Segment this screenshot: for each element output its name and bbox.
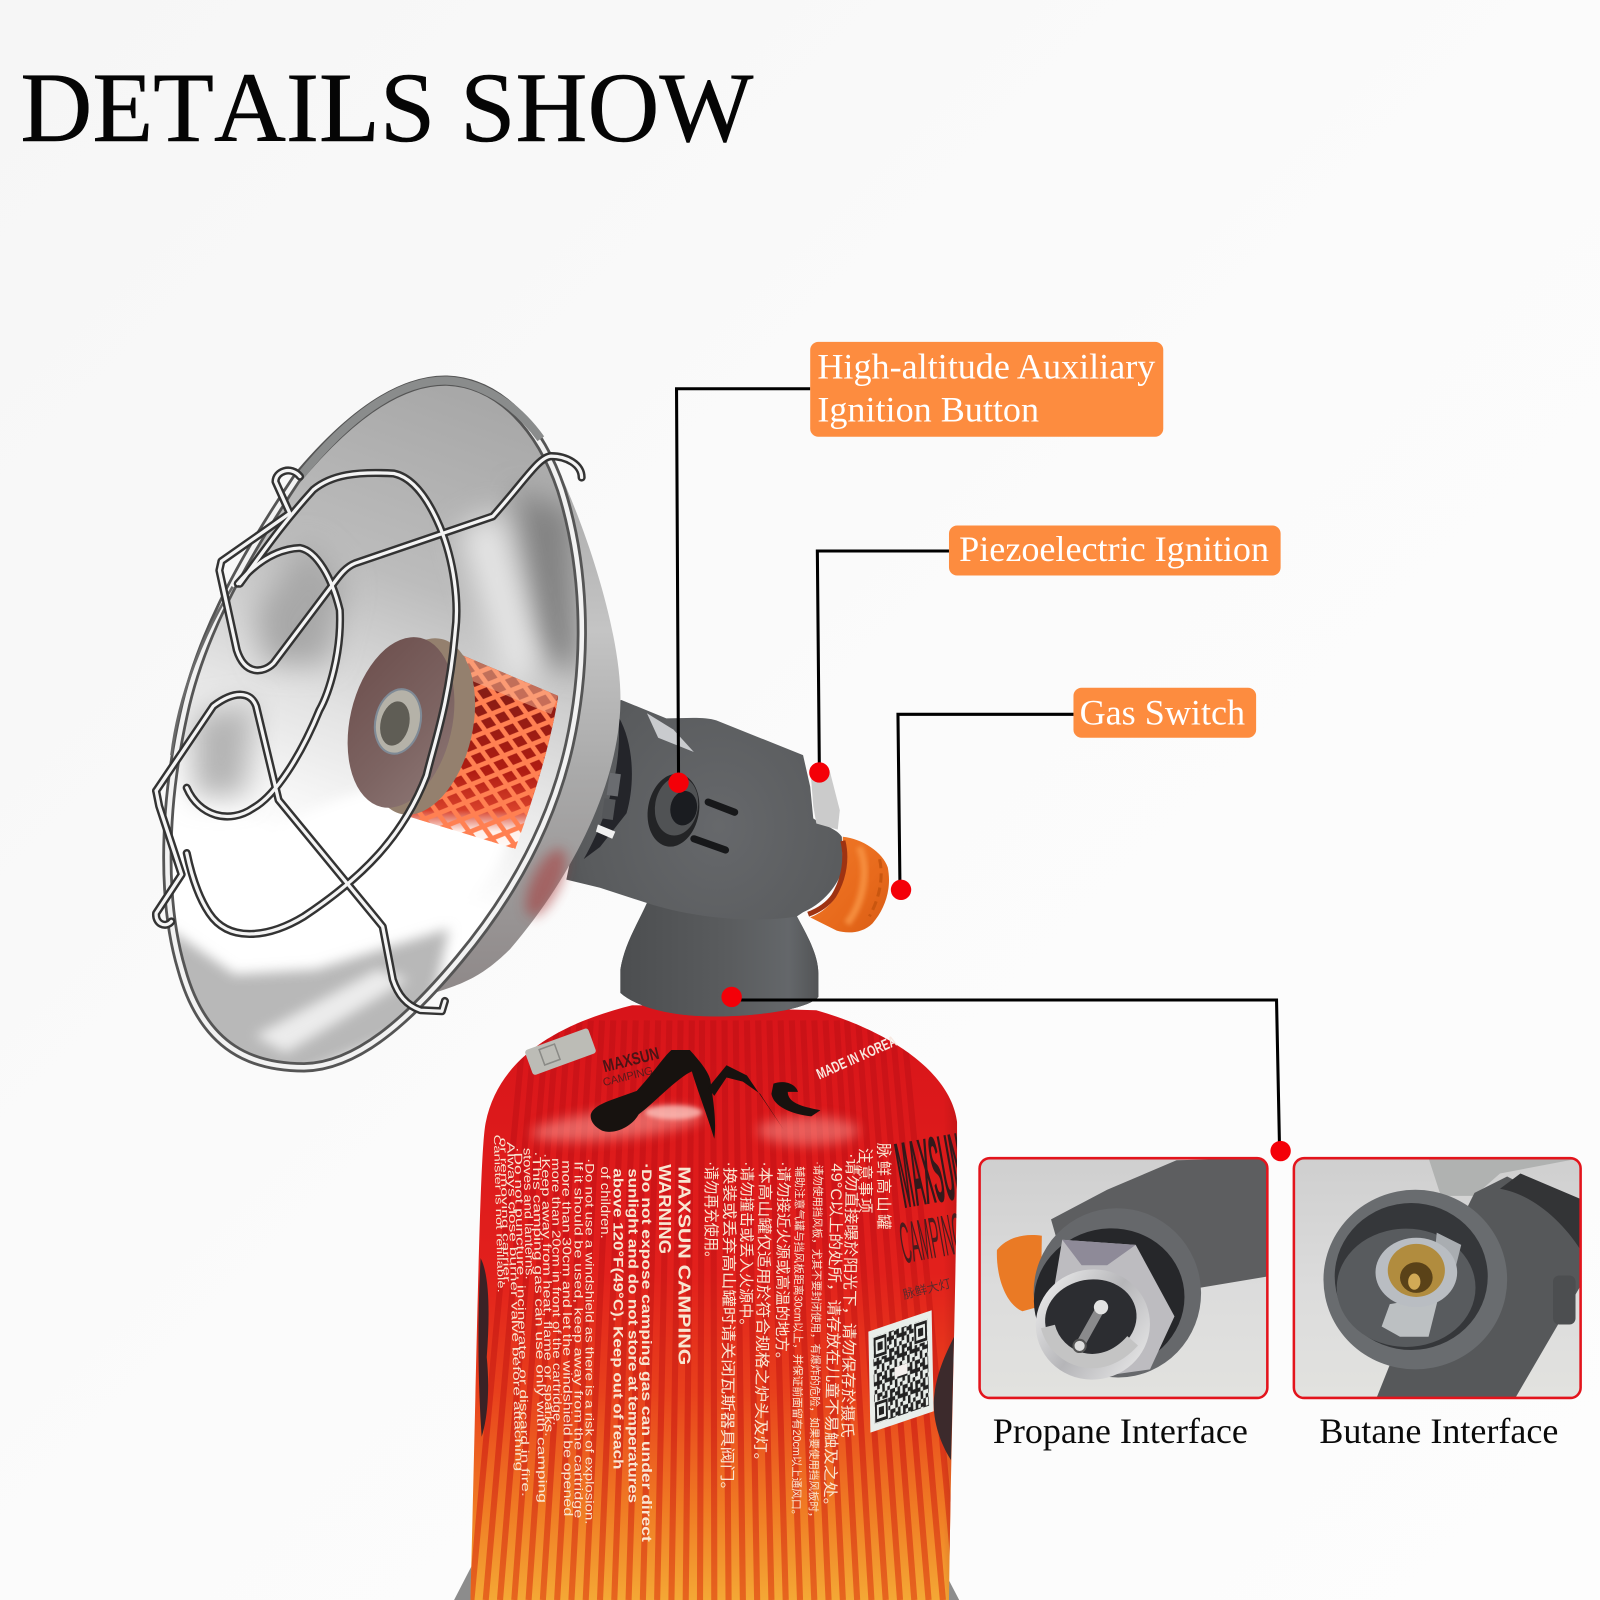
English warning text: above 120°F(49°C). Keep out of reach bbox=[609, 1168, 625, 1469]
label text: Gas Switch bbox=[1080, 692, 1245, 732]
callout: Piezoelectric Ignition bbox=[809, 526, 1281, 783]
piezo ignition button bbox=[810, 767, 840, 830]
leader line bbox=[898, 714, 1073, 890]
ignition button socket bbox=[642, 770, 735, 851]
canister body bbox=[449, 1005, 972, 1600]
Chinese warning text: ·请勿使用挡风板，尤其不要封闭使用，有爆炸的危险，如果要使用挡风板时， bbox=[806, 1161, 825, 1523]
inner dark cavity bbox=[1034, 1228, 1184, 1351]
mountain logo bbox=[591, 1050, 820, 1139]
English warning text: stoves and lanterns. bbox=[520, 1148, 536, 1280]
label text: Piezoelectric Ignition bbox=[959, 529, 1269, 569]
brand text vertical bbox=[894, 1133, 958, 1300]
Chinese warning text: ·本高山罐仅适用於符合规格之炉头及灯。 bbox=[751, 1161, 773, 1470]
metal tabs bbox=[1382, 1302, 1438, 1337]
Chinese warning text: ·请勿接近火源或高温的地方。 bbox=[772, 1161, 792, 1367]
body main housing bbox=[566, 700, 843, 1016]
made in korea: MADE IN KOREA bbox=[814, 1033, 899, 1083]
leader line bbox=[817, 551, 949, 772]
center pin bbox=[1081, 1309, 1100, 1344]
callout: interface connector bbox=[721, 987, 1291, 1161]
QR code bbox=[868, 1310, 934, 1433]
callout: High-altitude Auxiliary Ignition Button bbox=[668, 342, 1163, 793]
Chinese warning text: 辅助注意气罐与挡风板距离30cm以上，并保证前面留有20cm以上通风口。 bbox=[789, 1166, 807, 1521]
panel: butane interface photo bbox=[1294, 1158, 1581, 1398]
reflector interior bbox=[178, 386, 577, 1062]
side knob bbox=[1553, 1276, 1576, 1324]
English warning text: ·Do not puncture, incinerate, or discard in fire. bbox=[511, 1147, 531, 1497]
vent dark strip bbox=[584, 716, 632, 859]
housing label plate bbox=[647, 713, 694, 752]
English warning text: MAXSUN CAMPING bbox=[675, 1166, 695, 1365]
Chinese warning text bbox=[702, 1143, 892, 1523]
label text: Ignition Button bbox=[817, 389, 1039, 429]
Chinese warning text: ·请勿再充使用。 bbox=[702, 1161, 719, 1265]
English warning text: If it should be used, keep away from the cartridge bbox=[571, 1161, 585, 1519]
threaded fitting bbox=[1036, 1270, 1150, 1380]
panel: propane interface photo bbox=[980, 1158, 1267, 1398]
title: DETAILS SHOW bbox=[20, 52, 753, 163]
English warning text: ·Do not use a windshield as there is a risk of explosion. bbox=[583, 1158, 597, 1524]
burner nozzle bbox=[369, 685, 427, 758]
orange label bbox=[1073, 688, 1256, 738]
leader line bbox=[732, 1000, 1280, 1151]
burner disc bbox=[332, 626, 491, 826]
callout: Gas Switch bbox=[891, 688, 1256, 900]
reflector outer shell bbox=[367, 434, 620, 995]
marker dot on base bbox=[721, 987, 742, 1007]
English warning text: Canister is not refillable. bbox=[491, 1134, 506, 1293]
valve ring bbox=[1376, 1238, 1457, 1307]
reflector rim bbox=[167, 381, 582, 1067]
marker dot bbox=[809, 762, 830, 783]
orange knob bbox=[997, 1235, 1042, 1311]
caption: propane: Propane Interface bbox=[993, 1411, 1248, 1451]
gray neck bbox=[1377, 1177, 1581, 1398]
Chinese warning text: 脉鲜高山罐 bbox=[875, 1143, 892, 1230]
background metal bar bbox=[1429, 1158, 1581, 1196]
gray housing bbox=[1051, 1160, 1266, 1288]
Chinese warning text: ·请勿直接曝於阳光下，请勿保存於摄氏 bbox=[838, 1153, 860, 1438]
orange label bbox=[810, 342, 1163, 437]
wire guard bbox=[156, 456, 582, 1011]
hex nut bbox=[1051, 1240, 1174, 1378]
marker dot bbox=[668, 772, 689, 793]
Chinese warning text: 49°C以上的处所，请存放在儿童不易触及之处。 bbox=[820, 1163, 846, 1515]
English warning text bbox=[491, 1134, 695, 1542]
caption: butane: Butane Interface bbox=[1319, 1411, 1558, 1451]
English warning text: ·This camping gas can use only with camping bbox=[530, 1151, 549, 1503]
label text: High-altitude Auxiliary bbox=[817, 347, 1155, 387]
heating element mesh bbox=[410, 656, 558, 849]
leader line bbox=[677, 389, 810, 783]
brand small: CAMPING bbox=[602, 1065, 654, 1089]
English warning text: more than 20cm in front of the cartridge. bbox=[549, 1158, 563, 1426]
safety label bbox=[524, 1028, 597, 1076]
side artwork left bbox=[478, 1258, 489, 1437]
gas canister bbox=[449, 1005, 972, 1600]
vent details bbox=[596, 773, 621, 839]
English warning text: of children. bbox=[598, 1166, 613, 1239]
English warning text: Always close burner valve before attaching bbox=[504, 1142, 525, 1471]
English warning text: or removing carrier, bbox=[497, 1138, 512, 1286]
English warning text: WARNING bbox=[655, 1164, 675, 1254]
brand text vertical: 脉鲜大灯 bbox=[901, 1274, 953, 1303]
canister base ring bbox=[454, 1566, 959, 1600]
English warning text: more than 30cm and let the windshield be opened bbox=[559, 1160, 575, 1517]
collar ring bbox=[1034, 1208, 1202, 1378]
brand small bbox=[597, 1043, 664, 1089]
English warning text: ·Keep away from heat, flame or sparks. bbox=[539, 1153, 555, 1437]
collar ring bbox=[1323, 1190, 1507, 1369]
body bell base bbox=[620, 903, 818, 1016]
Chinese warning text: ·请勿撞击或丢入火源中。 bbox=[736, 1161, 756, 1334]
English warning text: ·Do not expose camping gas can under direct bbox=[638, 1163, 654, 1542]
English warning text: sunlight and do not store at temperatures bbox=[625, 1168, 641, 1503]
marker dot near photos bbox=[1270, 1141, 1291, 1161]
brand text vertical: CAMPING bbox=[895, 1202, 969, 1276]
Chinese warning text: 注意事项 bbox=[856, 1148, 874, 1213]
brass insert bbox=[1388, 1244, 1445, 1297]
gas switch knob bbox=[808, 837, 889, 932]
burner body bbox=[566, 700, 889, 1016]
shell reflection bbox=[517, 843, 574, 922]
side artwork right bbox=[934, 1337, 954, 1460]
brand small: MAXSUN bbox=[601, 1043, 661, 1076]
orange label bbox=[949, 526, 1281, 576]
brand text vertical: MAXSUN bbox=[889, 1113, 972, 1228]
Chinese warning text: ·换装或丢弃高山罐时请关闭瓦斯器具阀门。 bbox=[718, 1161, 737, 1499]
marker dot bbox=[891, 880, 911, 900]
